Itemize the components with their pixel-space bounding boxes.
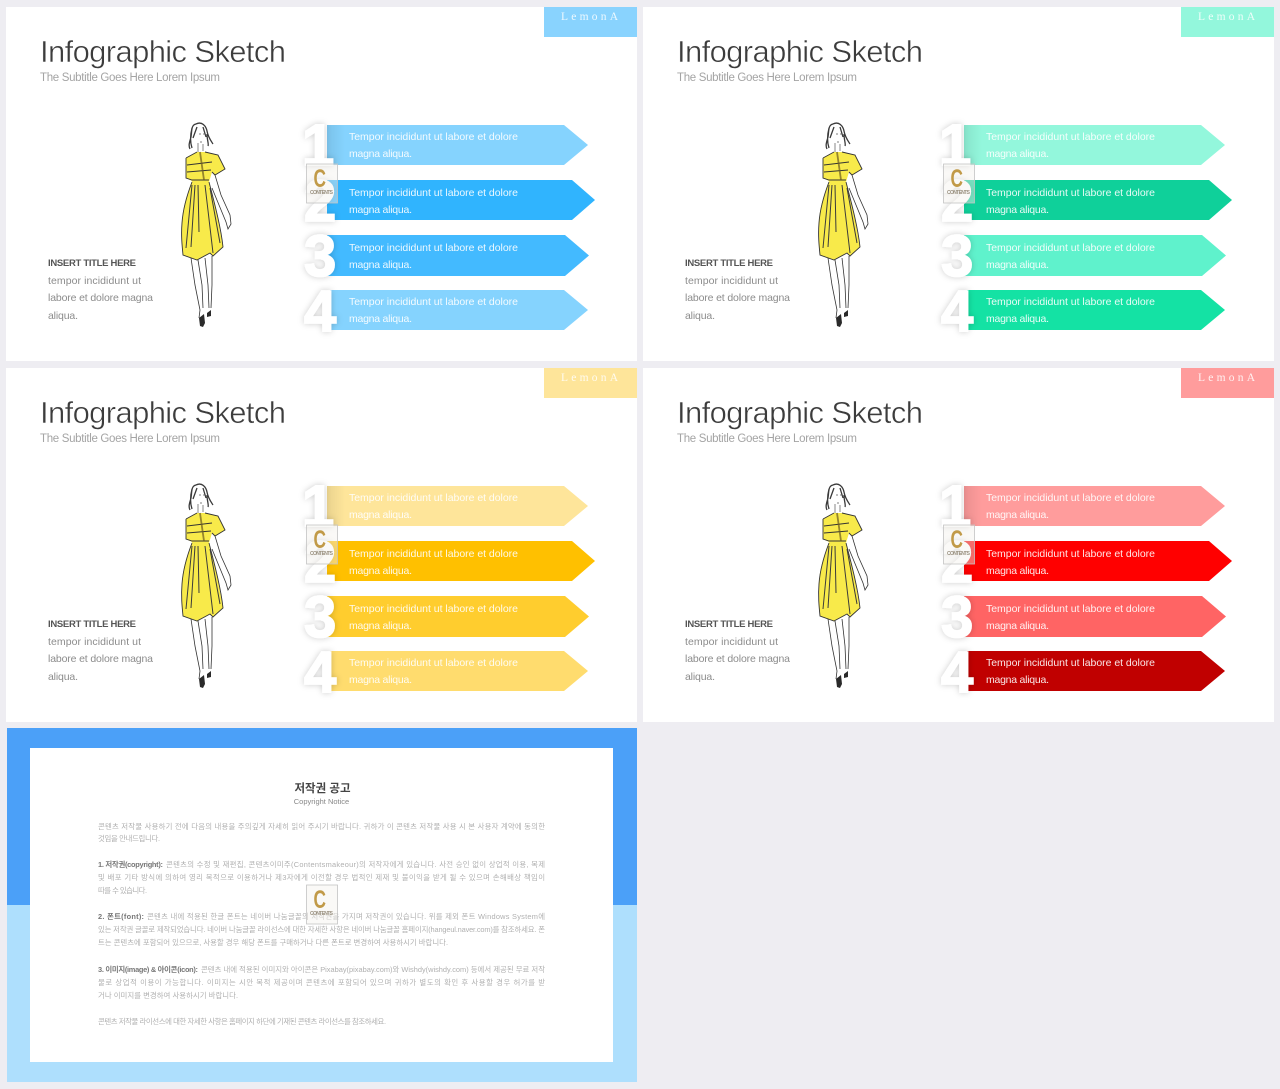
arrow 1 bbox=[939, 113, 1225, 178]
arrow 4: Tempor incididunt ut labore et dolore bbox=[986, 296, 1155, 308]
arrow 4: Tempor incididunt ut labore et dolore bbox=[349, 296, 518, 308]
arrow 2: 2 bbox=[304, 169, 336, 234]
notice subheading: Copyright Notice bbox=[294, 797, 349, 806]
arrow 2: 2 bbox=[941, 530, 973, 595]
notice intro: 것임을 안내드립니다. bbox=[98, 834, 160, 843]
arrow 3: magna aliqua. bbox=[986, 620, 1049, 632]
arrow 4 bbox=[941, 279, 1225, 344]
arrow 4: 4 bbox=[304, 640, 336, 705]
text block: insert title bbox=[685, 619, 790, 683]
brand tab bbox=[1181, 7, 1274, 37]
title: Infographic Sketch bbox=[677, 34, 923, 69]
notice closing line: 콘텐츠 저작물 라이선스에 대한 자세한 사항은 홈페이지 하단에 기재된 콘텐츠 라이선스를 참조하세요. bbox=[98, 1017, 386, 1026]
arrow 4: magna aliqua. bbox=[349, 313, 412, 325]
arrow 3 bbox=[304, 224, 589, 289]
arrow 2 bbox=[941, 530, 1232, 595]
logo watermark bbox=[306, 164, 338, 203]
arrow 4: 4 bbox=[941, 640, 973, 705]
notice section 3: 물로 상업적 이용이 가능합니다. 이미지는 시안 목적 제공이며 콘텐츠에 포함되어 있으며 귀하가 별도의 확인 후 사용할 경우 허가를 받 bbox=[98, 978, 545, 987]
arrow 3: magna aliqua. bbox=[349, 620, 412, 632]
arrow 2: magna aliqua. bbox=[986, 204, 1049, 216]
arrow 2: Tempor incididunt ut labore et dolore bbox=[986, 187, 1155, 199]
subtitle: The Subtitle Goes Here Lorem Ipsum bbox=[40, 433, 220, 445]
arrow 1 bbox=[302, 113, 588, 178]
arrow 2: Tempor incididunt ut labore et dolore bbox=[349, 548, 518, 560]
arrow 3: 3 bbox=[941, 585, 973, 650]
notice section 3: 거나 이미지를 변경하여 사용하시기 바랍니다. bbox=[98, 991, 238, 1000]
notice section 1: 콘텐츠의 수정 및 재편집, 콘텐츠이미주(Contentsmakeour)의 저작자에게 있습니다. 사전 승인 없이 상업적 이용, 복제 bbox=[166, 860, 545, 869]
text block: insert title: labore et dolore magna bbox=[685, 653, 790, 665]
arrow 1: magna aliqua. bbox=[986, 509, 1049, 521]
arrow 1: magna aliqua. bbox=[349, 148, 412, 160]
text block: insert title bbox=[48, 619, 153, 683]
text block: insert title bbox=[48, 258, 153, 322]
text block: insert title: labore et dolore magna bbox=[48, 292, 153, 304]
arrow 3 bbox=[304, 585, 589, 650]
notice intro bbox=[98, 822, 545, 843]
arrow 4 bbox=[304, 640, 588, 705]
arrow 2: magna aliqua. bbox=[986, 565, 1049, 577]
arrow 4: Tempor incididunt ut labore et dolore bbox=[986, 657, 1155, 669]
text block: insert title: INSERT TITLE HERE bbox=[48, 619, 136, 630]
arrow 1: Tempor incididunt ut labore et dolore bbox=[986, 131, 1155, 143]
arrow 2 bbox=[304, 169, 595, 234]
arrow 4: magna aliqua. bbox=[349, 674, 412, 686]
arrow 1: magna aliqua. bbox=[986, 148, 1049, 160]
arrow 1: Tempor incididunt ut labore et dolore bbox=[986, 492, 1155, 504]
arrow 1: Tempor incididunt ut labore et dolore bbox=[349, 492, 518, 504]
text block: insert title: aliqua. bbox=[48, 310, 78, 322]
arrow 4: magna aliqua. bbox=[986, 674, 1049, 686]
arrow 3: 3 bbox=[304, 224, 336, 289]
arrow 2: magna aliqua. bbox=[349, 565, 412, 577]
icon: fashion sketch figure bbox=[818, 123, 868, 327]
arrow 4: magna aliqua. bbox=[986, 313, 1049, 325]
text block: insert title: aliqua. bbox=[685, 671, 715, 683]
notice intro: 콘텐츠 저작물 사용하기 전에 다음의 내용을 주의깊게 자세히 읽어 주시기 바랍니다. 귀하가 이 콘텐츠 저작물 사용 시 본 사용자 계약에 동의한 bbox=[98, 822, 545, 831]
subtitle: The Subtitle Goes Here Lorem Ipsum bbox=[40, 72, 220, 84]
arrow 2: magna aliqua. bbox=[349, 204, 412, 216]
arrow 3: 3 bbox=[304, 585, 336, 650]
title: Infographic Sketch bbox=[40, 395, 286, 430]
notice section 2: 2. 폰트(font): bbox=[98, 912, 144, 921]
title: Infographic Sketch bbox=[40, 34, 286, 69]
text block: insert title: tempor incididunt ut bbox=[685, 275, 778, 287]
arrow 4 bbox=[941, 640, 1225, 705]
text block: insert title: labore et dolore magna bbox=[685, 292, 790, 304]
text block: insert title bbox=[685, 258, 790, 322]
brand tab bbox=[544, 368, 637, 398]
logo watermark bbox=[944, 164, 974, 203]
notice section 1: 따를 수 있습니다. bbox=[98, 886, 147, 895]
brand tab bbox=[1181, 368, 1274, 398]
arrow 1: Tempor incididunt ut labore et dolore bbox=[349, 131, 518, 143]
text block: insert title: INSERT TITLE HERE bbox=[48, 258, 136, 269]
arrow 3: Tempor incididunt ut labore et dolore bbox=[986, 242, 1155, 254]
title: Infographic Sketch bbox=[677, 395, 923, 430]
arrow 3 bbox=[941, 585, 1226, 650]
logo watermark bbox=[944, 525, 974, 564]
arrow 3: 3 bbox=[941, 224, 973, 289]
brand tab: LemonA bbox=[1198, 11, 1256, 23]
notice heading: 저작권 공고 bbox=[294, 781, 351, 795]
arrow 2: 2 bbox=[304, 530, 336, 595]
panel: blue variant bbox=[6, 7, 637, 361]
subtitle: The Subtitle Goes Here Lorem Ipsum bbox=[677, 72, 857, 84]
text block: insert title: labore et dolore magna bbox=[48, 653, 153, 665]
text block: insert title: tempor incididunt ut bbox=[48, 636, 141, 648]
text block: insert title: tempor incididunt ut bbox=[48, 275, 141, 287]
arrow 4: Tempor incididunt ut labore et dolore bbox=[349, 657, 518, 669]
arrow 3: Tempor incididunt ut labore et dolore bbox=[986, 603, 1155, 615]
panel: green variant bbox=[643, 7, 1274, 361]
arrow 4 bbox=[304, 279, 588, 344]
arrow 3: magna aliqua. bbox=[349, 259, 412, 271]
logo watermark bbox=[306, 885, 338, 924]
arrow 1: 1 bbox=[939, 474, 971, 539]
notice section 2: 있는 저작권 글꼴로 제작되었습니다. 네이버 나눔글꼴 라이선스에 대한 자세한 사항은 네이버 나눔글꼴 홈페이지(hangeul.naver.com)를 참조하세요. 폰 bbox=[98, 925, 545, 934]
arrow 1: 1 bbox=[302, 474, 334, 539]
text block: insert title: INSERT TITLE HERE bbox=[685, 258, 773, 269]
arrow 1 bbox=[302, 474, 588, 539]
arrow 2: Tempor incididunt ut labore et dolore bbox=[349, 187, 518, 199]
brand tab: LemonA bbox=[1198, 372, 1256, 384]
arrow 1: magna aliqua. bbox=[349, 509, 412, 521]
arrow 2: 2 bbox=[941, 169, 973, 234]
panel: yellow variant bbox=[6, 368, 637, 722]
subtitle: The Subtitle Goes Here Lorem Ipsum bbox=[677, 433, 857, 445]
panel: red variant bbox=[643, 368, 1274, 722]
arrow 4: 4 bbox=[304, 279, 336, 344]
text block: insert title: tempor incididunt ut bbox=[685, 636, 778, 648]
arrow 4: 4 bbox=[941, 279, 973, 344]
notice section 1: 및 배포 기타 방식에 의하여 영리 목적으로 이용하거나 제3자에게 이전할 경우 법적인 제재 및 불이익을 받게 될 수 있으며 손해배상 책임이 bbox=[98, 873, 545, 882]
arrow 2 bbox=[304, 530, 595, 595]
arrow 3: magna aliqua. bbox=[986, 259, 1049, 271]
text block: insert title: aliqua. bbox=[685, 310, 715, 322]
text block: insert title: INSERT TITLE HERE bbox=[685, 619, 773, 630]
icon: fashion sketch figure bbox=[182, 123, 231, 327]
arrow 1 bbox=[939, 474, 1225, 539]
arrow 2 bbox=[941, 169, 1232, 234]
brand tab: LemonA bbox=[561, 11, 619, 23]
brand tab: LemonA bbox=[561, 372, 619, 384]
icon: fashion sketch figure bbox=[818, 484, 868, 688]
arrow 1: 1 bbox=[939, 113, 971, 178]
notice section 1: 1. 저작권(copyright): bbox=[98, 860, 163, 869]
notice section 1 bbox=[98, 860, 545, 895]
notice section 3: 3. 이미지(image) & 아이콘(icon): bbox=[98, 965, 198, 974]
arrow 2: Tempor incididunt ut labore et dolore bbox=[986, 548, 1155, 560]
notice section 2 bbox=[98, 912, 545, 947]
panel: copyright notice bbox=[7, 728, 637, 1082]
notice section 3 bbox=[98, 965, 545, 1000]
icon: fashion sketch figure bbox=[182, 484, 231, 688]
notice section 2: 트는 콘텐츠에 포함되어 있으므로, 사용할 경우 해당 폰트를 구매하거나 다른 폰트로 변경하여 사용하시기 바랍니다. bbox=[98, 938, 448, 947]
brand tab bbox=[544, 7, 637, 37]
arrow 1: 1 bbox=[302, 113, 334, 178]
logo watermark bbox=[306, 525, 338, 564]
notice section 2: 콘텐츠 내에 적용된 한글 폰트는 네이버 나눔글꼴의 저작권을 가지며 저작권이 있습니다. 위를 제외 폰트 Windows System에 bbox=[147, 912, 545, 921]
arrow 3: Tempor incididunt ut labore et dolore bbox=[349, 242, 518, 254]
text block: insert title: aliqua. bbox=[48, 671, 78, 683]
arrow 3: Tempor incididunt ut labore et dolore bbox=[349, 603, 518, 615]
notice section 3: 콘텐츠 내에 적용된 이미지와 아이콘은 Pixabay(pixabay.com)와 Wishdy(wishdy.com) 등에서 제공된 무료 저작 bbox=[201, 965, 545, 974]
arrow 3 bbox=[941, 224, 1226, 289]
